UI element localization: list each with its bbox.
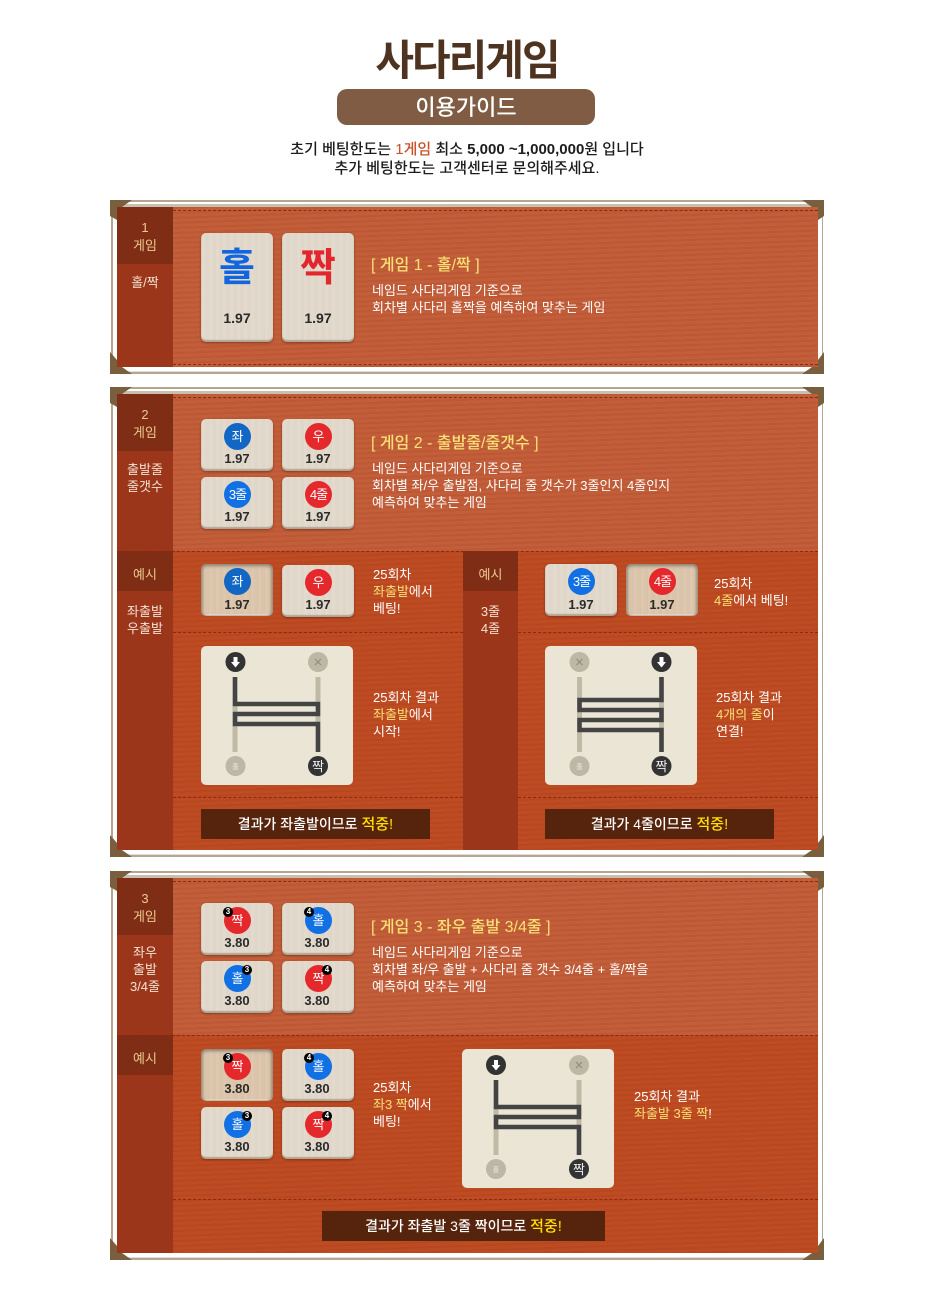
ladder result text left: 좌출발에서 (373, 707, 433, 722)
ladder result text left: 25회차 결과 (373, 690, 439, 705)
example bet text right (714, 576, 788, 608)
panel 2 sidebar (117, 394, 173, 850)
example card: 4줄 짝: 4 (325, 1111, 329, 1120)
card: 4줄 짝 (282, 961, 354, 1013)
panel 1 sidebar (117, 207, 173, 367)
card: 3줄 홀: 홀 (232, 971, 243, 986)
card: 3줄 홀: 3.80 (224, 993, 250, 1008)
card: 3줄: 1.97 (224, 509, 250, 524)
example card: 3줄 홀: 홀 (232, 1117, 243, 1132)
card: 4줄: 1.97 (305, 509, 331, 524)
example label right: 3줄 (481, 604, 500, 619)
card: 4줄 홀: 4 (307, 907, 311, 916)
card: 4줄 짝: 3.80 (304, 993, 330, 1008)
card: 3줄 짝 (201, 903, 273, 955)
example label left (127, 604, 163, 636)
ladder result text right: 4개의 줄이 (716, 707, 775, 722)
example label left: 우출발 (127, 621, 163, 636)
example card: 좌 selected: 좌 (232, 574, 243, 589)
card: 좌: 좌 (232, 429, 243, 444)
example card: 3줄 홀: 3.80 (224, 1139, 250, 1154)
example bet text right: 25회차 (714, 576, 752, 591)
panel 1 sidebar header (117, 207, 173, 264)
result bar left (201, 809, 430, 839)
game 3 description: 네임드 사다리게임 기준으로 (372, 945, 523, 960)
example card: 4줄 홀 (282, 1049, 354, 1101)
panel: game 2 (111, 387, 823, 857)
card: 우: 1.97 (305, 451, 331, 466)
ladder result text left (373, 690, 439, 739)
panel 3 sidebar label: 3/4줄 (130, 979, 160, 994)
panel: game 3 (111, 871, 823, 1260)
intro text: 추가 베팅한도는 고객센터로 문의해주세요. (334, 160, 600, 177)
panel 2 lower background (173, 551, 818, 850)
card: 3줄 짝: 3 (226, 907, 230, 916)
example card: 4줄 selected (626, 564, 698, 616)
panel 3 sidebar header: 3 (141, 891, 149, 906)
example header left (117, 551, 173, 591)
panel 3 sidebar (117, 878, 173, 1253)
intro text (290, 141, 644, 177)
result bar left: 결과가 좌출발이므로 적중! (238, 816, 393, 833)
game 3 description (372, 945, 648, 994)
example card: 4줄 홀: 홀 (313, 1059, 324, 1074)
panel 2 sidebar header: 2 (141, 407, 149, 422)
panel 3 sidebar header: 게임 (133, 909, 157, 924)
example card: 좌 selected (201, 564, 273, 616)
example card: 3줄: 1.97 (568, 597, 594, 612)
ladder result text right (716, 690, 782, 739)
result bar right: 결과가 4줄이므로 적중! (591, 816, 728, 833)
example bet text: 베팅! (373, 1114, 401, 1129)
ladder result text: 25회차 결과 (634, 1089, 700, 1104)
panel 1 sidebar header: 게임 (133, 238, 157, 253)
panel 3 lower background (173, 1035, 818, 1253)
card: 짝: 1.97 (304, 310, 332, 326)
panel: game 1 (111, 200, 823, 374)
card: 4줄 홀 (282, 903, 354, 955)
intro text: 초기 베팅한도는 1게임 최소 5,000 ~1,000,000원 입니다 (290, 141, 644, 158)
card: 4줄 (282, 477, 354, 529)
card: 3줄 홀 (201, 961, 273, 1013)
ladder result text right: 25회차 결과 (716, 690, 782, 705)
example bet text left: 25회차 (373, 567, 411, 582)
panel 3 sidebar label (130, 945, 160, 994)
title: 사다리게임 (375, 37, 559, 84)
card: 4줄 홀: 홀 (313, 913, 324, 928)
card: 홀: 홀 (219, 247, 255, 290)
panel 3 sidebar label: 좌우 (133, 945, 157, 960)
panel 2 sidebar label (127, 462, 163, 494)
example card: 4줄 selected: 4줄 (654, 574, 671, 589)
example card: 좌 selected: 1.97 (224, 597, 250, 612)
example bet text: 좌3 짝에서 (373, 1097, 432, 1112)
second column sidebar (463, 551, 518, 850)
ladder: game 3: 홀 (493, 1165, 500, 1174)
example card: 4줄 홀: 4 (307, 1053, 311, 1062)
game 2 description: 예측하여 맞추는 게임 (372, 495, 487, 510)
example label right: 4줄 (481, 621, 500, 636)
example card: 4줄 짝: 3.80 (304, 1139, 330, 1154)
card: 홀: 1.97 (223, 310, 251, 326)
example label left: 좌출발 (127, 604, 163, 619)
card: 짝 (282, 233, 354, 342)
card: 홀 (201, 233, 273, 342)
panel 1 sidebar header: 1 (141, 220, 149, 235)
example card: 4줄 홀: 3.80 (304, 1081, 330, 1096)
card: 우: 우 (313, 429, 324, 444)
game 2 description: 네임드 사다리게임 기준으로 (372, 461, 523, 476)
card: 4줄 짝: 짝 (313, 971, 324, 986)
example bet text left (373, 567, 433, 616)
game 3 heading: [ 게임 3 - 좌우 출발 3/4줄 ] (371, 919, 551, 936)
example bet text left: 좌출발에서 (373, 584, 433, 599)
game 2 description (372, 461, 670, 510)
game 1 description: 네임드 사다리게임 기준으로 (372, 283, 523, 298)
panel 2 upper background (173, 394, 818, 551)
example bet text (373, 1080, 432, 1129)
example header right: 예시 (479, 567, 502, 582)
example card: 3줄 홀: 3 (245, 1111, 249, 1120)
card: 좌 (201, 419, 273, 471)
panel 2 sidebar header: 게임 (133, 425, 157, 440)
example card: 3줄 짝 selected (201, 1049, 273, 1101)
ladder result text: 좌출발 3줄 짝! (634, 1106, 712, 1121)
ladder result text left: 시작! (373, 724, 401, 739)
panel 1 sidebar label: 홀/짝 (131, 275, 159, 290)
ladder: right start four rungs (545, 646, 697, 785)
example card: 우: 우 (313, 575, 324, 590)
ladder: left start three rungs: 짝 (312, 759, 324, 774)
panel 3 sidebar label: 출발 (133, 962, 157, 977)
example header left: 예시 (133, 567, 157, 582)
ladder result text right: 연결! (716, 724, 744, 739)
panel 2 sidebar label: 줄갯수 (127, 479, 163, 494)
result bar game 3 (322, 1211, 605, 1241)
ladder: left start three rungs: 홀 (232, 762, 239, 771)
card: 3줄: 3줄 (229, 487, 246, 502)
game 2 heading: [ 게임 2 - 출발줄/줄갯수 ] (371, 435, 539, 452)
card: 4줄 홀: 3.80 (304, 935, 330, 950)
panel 3 sidebar header (117, 878, 173, 935)
example card: 4줄 selected: 1.97 (649, 597, 675, 612)
card: 3줄 홀: 3 (245, 965, 249, 974)
game 3 description: 회차별 좌/우 출발 + 사다리 줄 갯수 3/4줄 + 홀/짝을 (372, 962, 648, 977)
game 1 description (372, 283, 605, 315)
example card: 4줄 짝: 짝 (313, 1117, 324, 1132)
panel 2 sidebar label: 출발줄 (127, 462, 163, 477)
ladder: game 3: 짝 (573, 1162, 585, 1177)
example label right (481, 604, 500, 636)
example card: 3줄 짝 selected: 3.80 (224, 1081, 250, 1096)
ladder: game 3 (462, 1049, 614, 1188)
subtitle pill (337, 89, 595, 125)
card: 좌: 1.97 (224, 451, 250, 466)
ladder: right start four rungs: 짝 (656, 759, 668, 774)
example card: 우: 1.97 (305, 597, 331, 612)
game 3 description: 예측하여 맞추는 게임 (372, 979, 487, 994)
subtitle pill: 이용가이드 (415, 95, 517, 120)
card: 4줄: 4줄 (310, 487, 327, 502)
card: 4줄 짝: 4 (325, 965, 329, 974)
game 1 heading: [ 게임 1 - 홀/짝 ] (371, 257, 480, 274)
ladder: left start three rungs (201, 646, 353, 785)
example card: 4줄 짝 (282, 1107, 354, 1159)
card: 3줄 짝: 3.80 (224, 935, 250, 950)
result bar right (545, 809, 774, 839)
ladder result text (634, 1089, 712, 1121)
card: 3줄 (201, 477, 273, 529)
panel 3 example header (117, 1035, 173, 1075)
example bet text left: 베팅! (373, 601, 401, 616)
panel 1 content background (173, 207, 818, 367)
panel 3 example header: 예시 (133, 1051, 157, 1066)
panel 3 upper background (173, 878, 818, 1035)
game 2 description: 회차별 좌/우 출발점, 사다리 줄 갯수가 3줄인지 4줄인지 (372, 478, 670, 493)
example card: 3줄 (545, 564, 617, 616)
card: 우 (282, 419, 354, 471)
example bet text: 25회차 (373, 1080, 411, 1095)
example card: 3줄: 3줄 (573, 574, 590, 589)
card: 3줄 짝: 짝 (232, 913, 243, 928)
card: 짝: 짝 (300, 247, 336, 290)
example bet text right: 4줄에서 베팅! (714, 593, 788, 608)
example header right (463, 551, 518, 591)
example card: 3줄 짝 selected: 짝 (232, 1059, 243, 1074)
example card: 3줄 짝 selected: 3 (226, 1053, 230, 1062)
result bar game 3: 결과가 좌출발 3줄 짝이므로 적중! (365, 1218, 562, 1235)
example card: 우 (282, 565, 354, 617)
ladder: right start four rungs: 홀 (576, 762, 583, 771)
example card: 3줄 홀 (201, 1107, 273, 1159)
panel 2 sidebar header (117, 394, 173, 451)
game 1 description: 회차별 사다리 홀짝을 예측하여 맞추는 게임 (372, 300, 605, 315)
